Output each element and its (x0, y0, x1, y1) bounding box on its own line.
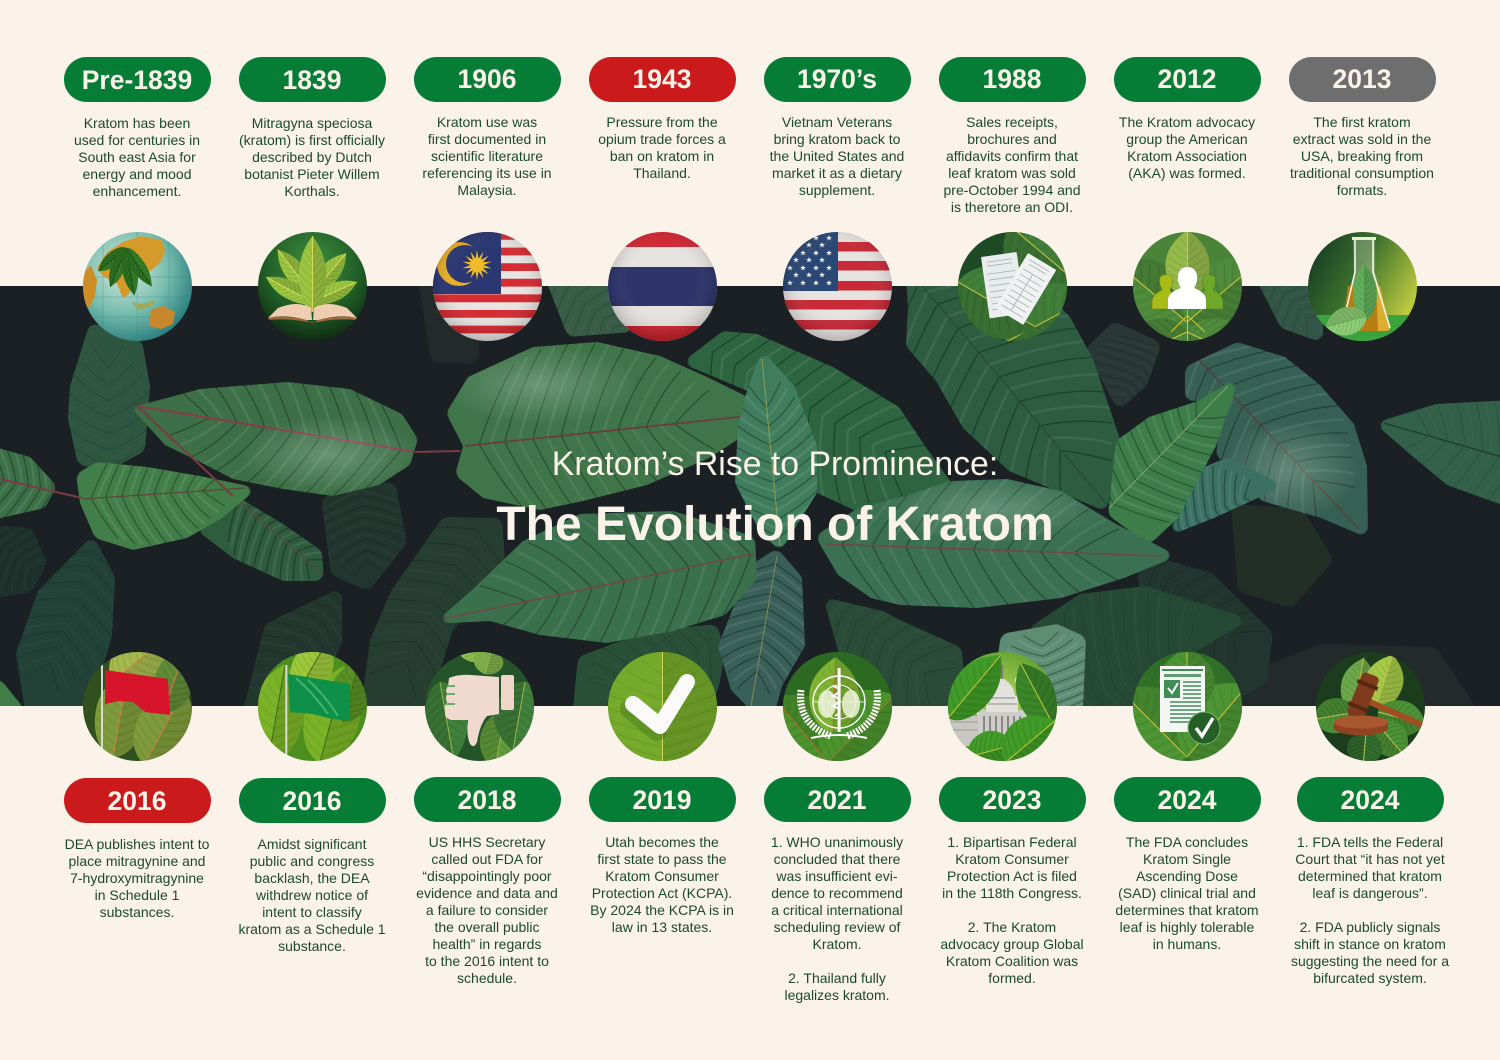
description: The FDA concludes (1126, 834, 1248, 850)
year pill (64, 778, 210, 823)
description (1087, 834, 1287, 952)
description: described by Dutch (252, 149, 372, 165)
description: 1. Bipartisan Federal (947, 834, 1077, 850)
timeline entry: 2019 (574, 777, 750, 947)
icon: US Capitol among leaves (948, 652, 1056, 760)
timeline entry: 2021 (749, 777, 925, 947)
description: backlash, the DEA (254, 870, 370, 886)
description: 1. WHO unanimously (771, 834, 903, 850)
timeline entry: 1943 (589, 57, 736, 181)
description (737, 834, 937, 1004)
description: suggesting the need for a (1291, 952, 1449, 968)
description: traditional consumption (1290, 165, 1434, 181)
description: concluded that there (774, 850, 900, 866)
description (1290, 114, 1434, 198)
description: The Kratom advocacy (1119, 114, 1255, 130)
icon: USA flag (783, 232, 892, 341)
icon: approved document with check badge (1132, 652, 1242, 760)
description: a critical international (771, 902, 903, 918)
description (212, 836, 412, 954)
year pill: 2024 (1341, 785, 1399, 815)
description: botanist Pieter Willem (244, 166, 380, 182)
year pill (1114, 777, 1260, 822)
year pill: 2023 (983, 785, 1041, 815)
description: 2. The Kratom (968, 918, 1056, 934)
description: Malaysia. (457, 182, 517, 198)
description: (SAD) clinical trial and (1118, 884, 1256, 900)
year pill: 1839 (283, 65, 341, 95)
description: schedule. (457, 970, 517, 986)
main heading: The Evolution of Kratom (496, 498, 1054, 551)
description: brochures and (967, 131, 1057, 147)
description: Korthals. (284, 183, 340, 199)
icon: leaf on open book (258, 232, 367, 341)
description: Vietnam Veterans (782, 114, 892, 130)
year pill (588, 777, 736, 822)
icon: green flag on leaves (258, 652, 367, 761)
photo band: kratom leaves background (0, 286, 1500, 706)
description: Protection Act (KCPA). (592, 884, 732, 900)
description: first documented in (428, 131, 546, 147)
timeline entry: 2013 (1289, 57, 1436, 198)
description: called out FDA for (431, 850, 543, 866)
description: intent to classify (262, 904, 362, 920)
description: 2. FDA publicly signals (1300, 918, 1440, 934)
year pill: 2013 (1333, 64, 1391, 94)
description: withdrew notice of (256, 886, 368, 902)
description: bifurcated system. (1313, 970, 1427, 986)
icon: association members on leaves (1133, 232, 1242, 341)
description: market it as a dietary (772, 165, 902, 181)
year pill (938, 56, 1086, 102)
year pill: 1970’s (797, 64, 877, 94)
description: dence to recommend (771, 884, 903, 900)
year pill (938, 777, 1086, 822)
year pill (764, 777, 910, 822)
year pill: Pre-1839 (82, 65, 192, 95)
year pill (414, 56, 560, 102)
description: determined that kratom (1298, 868, 1442, 884)
description: Kratom Association (1127, 148, 1247, 164)
description: opium trade forces a (598, 131, 726, 147)
timeline entry: 1906 (414, 57, 561, 198)
timeline entry: 2023 (924, 777, 1100, 947)
year pill: 2016 (108, 786, 166, 816)
description: Kratom. (812, 936, 862, 952)
description: referencing its use in (422, 165, 552, 181)
year pill (1288, 56, 1436, 102)
description (37, 836, 237, 920)
description: The first kratom (1313, 114, 1411, 130)
description: “disappointingly poor (422, 868, 552, 884)
description: Kratom use was (437, 114, 537, 130)
description: Mitragyna speciosa (252, 115, 372, 131)
description: determines that kratom (1115, 902, 1259, 918)
description: 2. Thailand fully (788, 970, 886, 986)
description: Kratom has been (84, 115, 190, 131)
timeline entry: 2018 (399, 777, 575, 947)
description: evidence and data and (416, 884, 558, 900)
year pill (588, 56, 736, 102)
description (387, 834, 587, 986)
icon: Malaysia flag (433, 232, 542, 341)
description: in the 118th Congress. (942, 884, 1082, 900)
description: legalizes kratom. (784, 986, 890, 1002)
year pill (238, 778, 386, 823)
description: Court that “it has not yet (1295, 850, 1445, 866)
description (562, 834, 762, 936)
description: By 2024 the KCPA is in (590, 902, 734, 918)
description: in Schedule 1 (95, 886, 179, 902)
icon: Thailand flag (608, 232, 717, 341)
timeline entry: 2024 FDA court (1282, 777, 1458, 947)
description: DEA publishes intent to (65, 836, 209, 852)
description: is theretore an ODI. (951, 199, 1073, 215)
description: USA, breaking from (1301, 148, 1423, 164)
description: in humans. (1153, 936, 1221, 952)
timeline entry: 1988 (939, 57, 1086, 215)
description: formats. (1337, 182, 1387, 198)
description: shift in stance on kratom (1294, 936, 1446, 952)
description: affidavits confirm that (946, 148, 1078, 164)
icon: thumbs down (425, 652, 534, 761)
description: a failure to consider (426, 902, 548, 918)
description: leaf is highly tolerable (1120, 918, 1254, 934)
description: substances. (100, 904, 174, 920)
year pill: 1906 (458, 64, 516, 94)
timeline entry: 2016 green (224, 778, 400, 948)
description: Pressure from the (606, 114, 718, 130)
description: the overall public (434, 918, 540, 934)
year pill (764, 56, 910, 102)
description: formed. (988, 970, 1036, 986)
year pill: 2018 (458, 785, 516, 815)
description (770, 114, 904, 198)
description: first state to pass the (597, 850, 727, 866)
year pill: 2024 (1158, 785, 1216, 815)
icon: globe with leaf (83, 232, 192, 341)
description: ban on kratom in (610, 148, 714, 164)
title (496, 445, 1054, 551)
description: pre-October 1994 and (944, 182, 1080, 198)
description: Sales receipts, (966, 114, 1058, 130)
timeline entry: 2012 (1114, 57, 1261, 181)
description: Utah becomes the (605, 834, 719, 850)
description (1119, 114, 1256, 181)
description (239, 115, 385, 199)
description: extract was sold in the (1293, 131, 1431, 147)
description: US HHS Secretary (429, 834, 545, 850)
description (74, 115, 200, 199)
description: Ascending Dose (1136, 868, 1238, 884)
description: enhancement. (93, 183, 181, 199)
description: Kratom Single (1143, 850, 1231, 866)
description (422, 114, 552, 198)
description: leaf is dangerous”. (1312, 884, 1428, 900)
description: Kratom Coalition was (946, 952, 1078, 968)
icon: gavel on leaves (1316, 652, 1424, 760)
icon: check mark on leaf (608, 652, 716, 760)
year pill: 2016 (283, 786, 341, 816)
description (598, 114, 726, 181)
icon: WHO emblem on leaves (782, 652, 892, 760)
description: leaf kratom was sold (948, 165, 1076, 181)
subtitle: Kratom’s Rise to Prominence: (552, 445, 998, 483)
year pill: 2012 (1158, 64, 1216, 94)
description: law in 13 states. (612, 918, 712, 934)
description (1270, 834, 1470, 986)
description: 1. FDA tells the Federal (1297, 834, 1443, 850)
year pill (1296, 777, 1444, 822)
description (912, 834, 1112, 986)
icon: red flag on leaves (83, 652, 192, 761)
icon: flask with leaf (1308, 232, 1417, 341)
year pill (238, 57, 386, 102)
description: Kratom Consumer (605, 868, 719, 884)
timeline entry: 1839 (239, 57, 386, 199)
description: energy and mood (83, 166, 191, 182)
year pill (64, 57, 210, 102)
year pill: 2019 (633, 785, 691, 815)
description: to the 2016 intent to (425, 952, 549, 968)
year pill (414, 777, 560, 822)
description: (kratom) is first officially (239, 132, 385, 148)
description: the United States and (770, 148, 904, 164)
description: health” in regards (433, 936, 541, 952)
description: Amidst significant (258, 836, 366, 852)
description (944, 114, 1080, 215)
timeline entry: Pre-1839 (64, 57, 211, 199)
description: used for centuries in (74, 132, 200, 148)
description: scheduling review of (774, 918, 900, 934)
year pill: 2021 (808, 785, 866, 815)
description: advocacy group Global (940, 936, 1084, 952)
description: group the American (1126, 131, 1248, 147)
description: bring kratom back to (774, 131, 900, 147)
timeline entry: 1970's (764, 57, 911, 198)
year pill: 1988 (983, 64, 1041, 94)
year pill (1114, 56, 1260, 102)
description: Kratom Consumer (955, 850, 1069, 866)
description: (AKA) was formed. (1128, 165, 1246, 181)
description: public and congress (250, 852, 374, 868)
description: substance. (278, 938, 346, 954)
description: scientific literature (431, 148, 543, 164)
icon: documents on leaves (958, 232, 1067, 341)
description: kratom as a Schedule 1 (238, 920, 386, 936)
timeline entry: 2024 FDA trial (1099, 777, 1275, 947)
description: Protection Act is filed (947, 868, 1077, 884)
description: place mitragynine and (68, 852, 205, 868)
description: Thailand. (633, 165, 691, 181)
year pill: 1943 (633, 64, 691, 94)
timeline entry: 2016 red (49, 778, 225, 948)
description: was insufficient evi- (776, 868, 898, 884)
description: 7-hydroxymitragynine (70, 870, 204, 886)
description: South east Asia for (78, 149, 196, 165)
description: supplement. (799, 182, 875, 198)
